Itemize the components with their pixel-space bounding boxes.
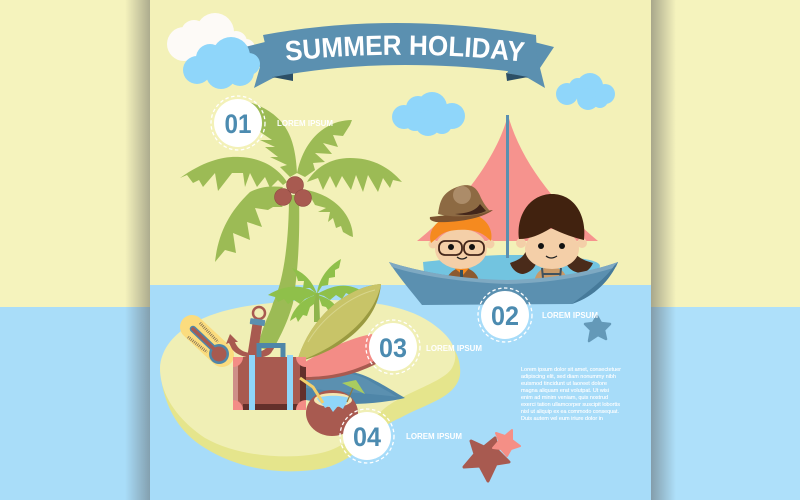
body text block: Lorem ipsum dolor sit amet, consectetuer bbox=[521, 367, 621, 373]
icon: white cloud bbox=[167, 13, 255, 61]
palm trunk bbox=[258, 195, 299, 350]
body text block: euismod tincidunt ut laoreet dolore bbox=[521, 381, 607, 387]
body text block: Duis autem vel eum iriure dolor in bbox=[521, 416, 603, 422]
step 04 label: LOREM IPSUM bbox=[406, 432, 462, 441]
step 02 label: LOREM IPSUM bbox=[542, 311, 598, 320]
step 01 badge: 01 bbox=[224, 109, 252, 139]
icon: pink starfish bbox=[493, 430, 520, 456]
body text block: nisl ut aliquip ex ea commodo consequat. bbox=[521, 409, 619, 415]
surfboard: blue bbox=[306, 371, 405, 404]
palm leaves bbox=[180, 99, 402, 262]
sailboat bbox=[389, 115, 618, 305]
icon: maroon starfish bbox=[464, 438, 509, 481]
island bbox=[160, 300, 460, 471]
title banner bbox=[247, 23, 554, 88]
body text block: magna aliquam erat volutpat. Ut wisi bbox=[521, 388, 609, 394]
coconuts bbox=[274, 176, 312, 206]
surfboard: pink bbox=[305, 334, 378, 380]
icon: blue cloud right bbox=[556, 73, 615, 110]
icon: thermometer bbox=[188, 323, 229, 364]
step 01 badge bbox=[211, 96, 265, 150]
body text block: adipiscing elit, sed diam nonummy nibh bbox=[521, 374, 616, 380]
title: SUMMER HOLIDAY bbox=[286, 36, 526, 61]
step 02 badge: 02 bbox=[491, 301, 519, 331]
glasses bbox=[439, 241, 484, 255]
step 04 badge bbox=[340, 409, 394, 463]
step 03 badge bbox=[366, 320, 420, 374]
mast bbox=[506, 115, 509, 258]
step 02 badge bbox=[478, 288, 532, 342]
small palm tree bbox=[268, 259, 362, 322]
surfboard: olive bbox=[297, 284, 381, 362]
icon: blue cloud left bbox=[183, 37, 260, 89]
body text block bbox=[521, 367, 621, 422]
step 04 badge: 04 bbox=[353, 422, 381, 452]
step 03 badge: 03 bbox=[379, 333, 407, 363]
icon: anchor bbox=[226, 307, 276, 358]
boat hull bbox=[389, 262, 618, 305]
body text block: exerci tation ullamcorper suscipit lobortis bbox=[521, 402, 620, 408]
step 01 label: LOREM IPSUM bbox=[277, 119, 333, 128]
girl character bbox=[510, 194, 593, 282]
sail bbox=[417, 115, 598, 241]
boy character bbox=[428, 185, 494, 282]
icon: coconut drink bbox=[300, 378, 365, 436]
icon: suitcase bbox=[233, 346, 306, 410]
body text block: enim ad minim veniam, quis nostrud bbox=[521, 395, 608, 401]
icon: blue starfish bbox=[585, 316, 610, 341]
central panel background bbox=[150, 0, 651, 500]
icon: blue cloud middle bbox=[392, 92, 465, 136]
large palm tree bbox=[180, 99, 402, 350]
left side background panel bbox=[0, 0, 150, 500]
step 03 label: LOREM IPSUM bbox=[426, 344, 482, 353]
right side background panel bbox=[650, 0, 800, 500]
boat deck bbox=[423, 255, 600, 285]
hat bbox=[430, 210, 493, 222]
